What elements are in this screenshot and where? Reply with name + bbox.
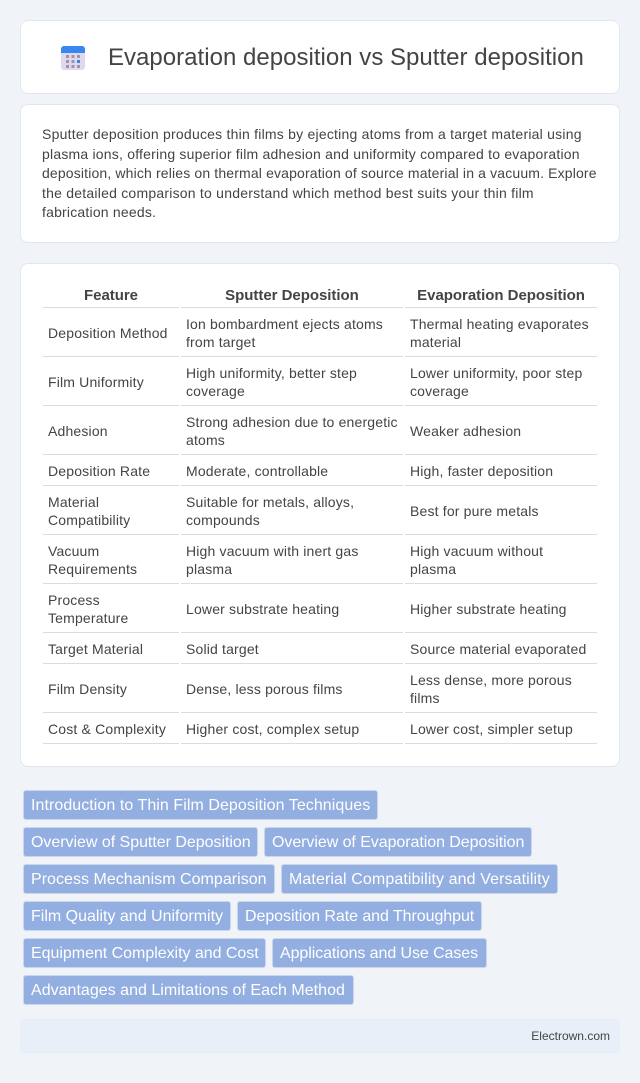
- row: film uniformity: Lower uniformity, poor step: [410, 365, 582, 381]
- row: deposition rate: Moderate, controllable: [186, 463, 328, 479]
- tag: film quality: Film Quality and Uniformity: [31, 908, 223, 925]
- tag: introduction: Introduction to Thin Film Deposition Techniques: [31, 797, 370, 814]
- tag: applications: Applications and Use Cases: [280, 945, 478, 962]
- column headers: Feature: [84, 287, 138, 304]
- tag: process mechanism: Process Mechanism Comparison: [31, 871, 267, 888]
- column headers: [84, 287, 585, 304]
- row: deposition rate: [48, 463, 553, 479]
- column headers: Sputter Deposition: [225, 287, 359, 304]
- row: film density: Dense, less porous films: [186, 681, 343, 697]
- row: vacuum requirements: High vacuum without: [410, 543, 543, 559]
- row: vacuum requirements: plasma: [410, 561, 456, 577]
- tag: sputter overview: [23, 827, 258, 857]
- title: Evaporation deposition vs Sputter deposition: [108, 44, 584, 71]
- row: target material: [48, 641, 586, 657]
- row: film uniformity: High uniformity, better step: [186, 365, 357, 381]
- row: deposition method: Deposition Method: [48, 325, 168, 341]
- tag: deposition rate: [237, 901, 482, 931]
- row: film density: Film Density: [48, 681, 127, 697]
- header panel: [20, 20, 620, 94]
- row: material compatibility: Best for pure metals: [410, 503, 539, 519]
- row: cost and complexity: Lower cost, simpler setup: [410, 721, 573, 737]
- row: material compatibility: Compatibility: [48, 512, 130, 528]
- footer credit: Electrown.com: [531, 1029, 610, 1043]
- intro paragraph: plasma ions, offering superior film adhesion and uniformity compared to evaporation: [42, 146, 580, 162]
- row: film uniformity: coverage: [186, 383, 245, 399]
- tag: deposition rate: Deposition Rate and Throughput: [245, 908, 474, 925]
- tag: equipment: [23, 938, 266, 968]
- intro paragraph: fabrication needs.: [42, 204, 156, 220]
- tag: introduction: [23, 790, 378, 820]
- row: material compatibility: [48, 494, 539, 528]
- row: target material: Solid target: [186, 641, 259, 657]
- tag: process mechanism: [23, 864, 275, 894]
- row: adhesion: Strong adhesion due to energetic: [186, 414, 398, 430]
- row: deposition method: Thermal heating evaporates: [410, 316, 589, 332]
- row: process temperature: Process: [48, 592, 100, 608]
- intro text panel: [20, 104, 620, 243]
- row: vacuum requirements: Vacuum: [48, 543, 99, 559]
- row: process temperature: Higher substrate heating: [410, 601, 567, 617]
- row: adhesion: Weaker adhesion: [410, 423, 521, 439]
- row: adhesion: [48, 414, 521, 448]
- tag: applications: [272, 938, 487, 968]
- row: film uniformity: Film Uniformity: [48, 374, 144, 390]
- tag: evaporation overview: Overview of Evaporation Deposition: [272, 834, 524, 851]
- tag: evaporation overview: [264, 827, 532, 857]
- intro paragraph: [42, 126, 597, 220]
- intro paragraph: deposition, which relies on thermal evaporation of source material in a vacuum. Explore: [42, 165, 597, 181]
- row: deposition method: Ion bombardment ejects atoms: [186, 316, 383, 332]
- row: film density: Less dense, more porous: [410, 672, 572, 688]
- row: deposition method: from target: [186, 334, 256, 350]
- row: cost and complexity: Higher cost, complex setup: [186, 721, 359, 737]
- column headers: Evaporation Deposition: [417, 287, 585, 304]
- row: target material: Target Material: [48, 641, 143, 657]
- row: target material: Source material evaporated: [410, 641, 586, 657]
- row: cost and complexity: [48, 721, 573, 737]
- comparison table: [43, 287, 597, 744]
- row: vacuum requirements: [48, 543, 543, 577]
- tag: advantages: Advantages and Limitations of Each Method: [31, 982, 345, 999]
- tag: equipment: Equipment Complexity and Cost: [31, 945, 259, 962]
- row: deposition rate: Deposition Rate: [48, 463, 150, 479]
- tag: sputter overview: Overview of Sputter Deposition: [31, 834, 251, 851]
- row: process temperature: Temperature: [48, 610, 128, 626]
- row: vacuum requirements: High vacuum with inert gas: [186, 543, 358, 559]
- row: film density: [48, 672, 572, 706]
- footer bar: [20, 1019, 620, 1053]
- row: material compatibility: Suitable for metals, alloys,: [186, 494, 354, 510]
- tag: film quality: [23, 901, 231, 931]
- row: cost and complexity: Cost & Complexity: [48, 721, 166, 737]
- row: material compatibility: compounds: [186, 512, 260, 528]
- row: deposition method: [48, 316, 589, 350]
- comparison table panel: [20, 263, 620, 767]
- row: deposition rate: High, faster deposition: [410, 463, 553, 479]
- row: adhesion: Adhesion: [48, 423, 108, 439]
- tag: material compatibility: Material Compatibility and Versatility: [289, 871, 550, 888]
- tag: material compatibility: [281, 864, 558, 894]
- row: film uniformity: coverage: [410, 383, 469, 399]
- row: process temperature: [48, 592, 567, 626]
- row: film uniformity: [48, 365, 582, 399]
- row: deposition method: material: [410, 334, 461, 350]
- topic tags: [23, 790, 558, 1005]
- row: material compatibility: Material: [48, 494, 99, 510]
- row: vacuum requirements: Requirements: [48, 561, 137, 577]
- intro paragraph: the detailed comparison to understand which method best suits your thin film: [42, 184, 534, 200]
- tag: advantages: [23, 975, 354, 1005]
- icon: calendar grid: [61, 46, 85, 70]
- row: adhesion: atoms: [186, 432, 225, 448]
- intro paragraph: Sputter deposition produces thin films by ejecting atoms from a target material using: [42, 126, 582, 142]
- row: vacuum requirements: plasma: [186, 561, 232, 577]
- row: film density: films: [410, 690, 440, 706]
- row: process temperature: Lower substrate heating: [186, 601, 339, 617]
